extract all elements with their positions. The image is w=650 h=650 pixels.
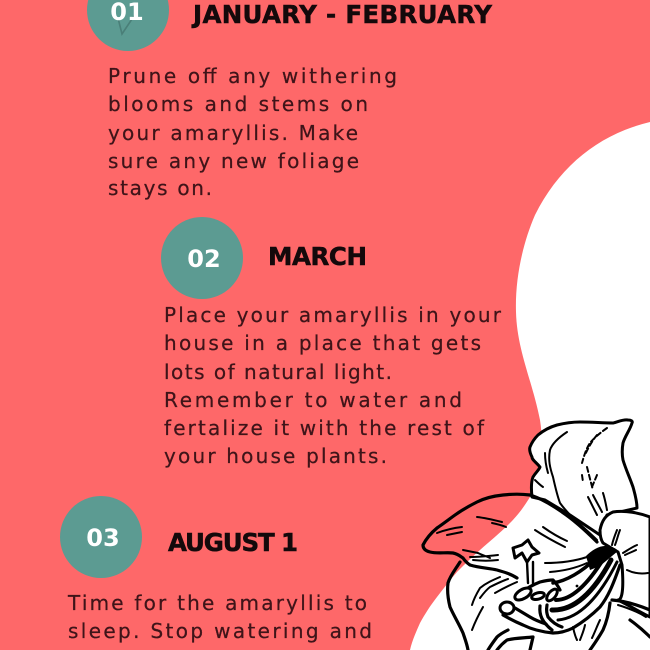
step 2 text: fertalize it with the rest of — [164, 416, 485, 440]
step 3 text — [67, 591, 372, 643]
step 2 — [161, 217, 502, 468]
star stigma — [513, 540, 539, 562]
step 2 number badge: 02 — [187, 245, 221, 273]
step 3 — [60, 496, 372, 643]
left petal veins — [437, 517, 506, 535]
step 1 heading: JANUARY - FEBRUARY — [191, 0, 492, 29]
step 2 text: Place your amaryllis in your — [164, 303, 502, 327]
step 1 text: Prune off any withering — [108, 64, 397, 88]
step 1 text: your amaryllis. Make — [108, 121, 358, 145]
step 2 text: your house plants. — [164, 444, 387, 468]
step 3 text: sleep. Stop watering and — [68, 619, 372, 643]
anthers — [500, 586, 559, 614]
step 3 number badge: 03 — [86, 524, 120, 552]
icon: amaryllis flower line drawing — [423, 420, 650, 650]
right petal — [600, 511, 650, 617]
step 1 text: sure any new foliage — [108, 149, 359, 173]
lower left petal — [448, 562, 468, 650]
step 1 number badge — [87, 0, 169, 51]
step 2 text: Remember to water and — [164, 388, 462, 412]
step 1 text: stays on. — [108, 176, 212, 200]
step 3 heading: AUGUST 1 — [168, 528, 298, 557]
step 2 number badge — [161, 217, 243, 299]
long stamen — [503, 565, 620, 633]
step 2 text: lots of natural light. — [164, 360, 392, 384]
upper petal — [530, 420, 637, 535]
style stem — [527, 562, 533, 585]
step 3 number badge — [60, 496, 142, 578]
step 1 — [87, 0, 492, 200]
step 1 text — [108, 64, 397, 200]
step 1 text: blooms and stems on — [108, 92, 368, 116]
left petal outline — [423, 494, 530, 578]
step 2 text: house in a place that gets — [164, 331, 481, 355]
stamens tube — [552, 558, 617, 620]
lower right petal and stem — [590, 600, 650, 650]
upper petal veins — [549, 432, 597, 540]
step 3 text: Time for the amaryllis to — [67, 591, 367, 615]
flower throat — [586, 546, 618, 570]
filaments — [540, 605, 562, 630]
white blob shape — [410, 122, 650, 650]
step 2 text — [164, 303, 502, 468]
step 2 heading: MARCH — [268, 242, 367, 271]
